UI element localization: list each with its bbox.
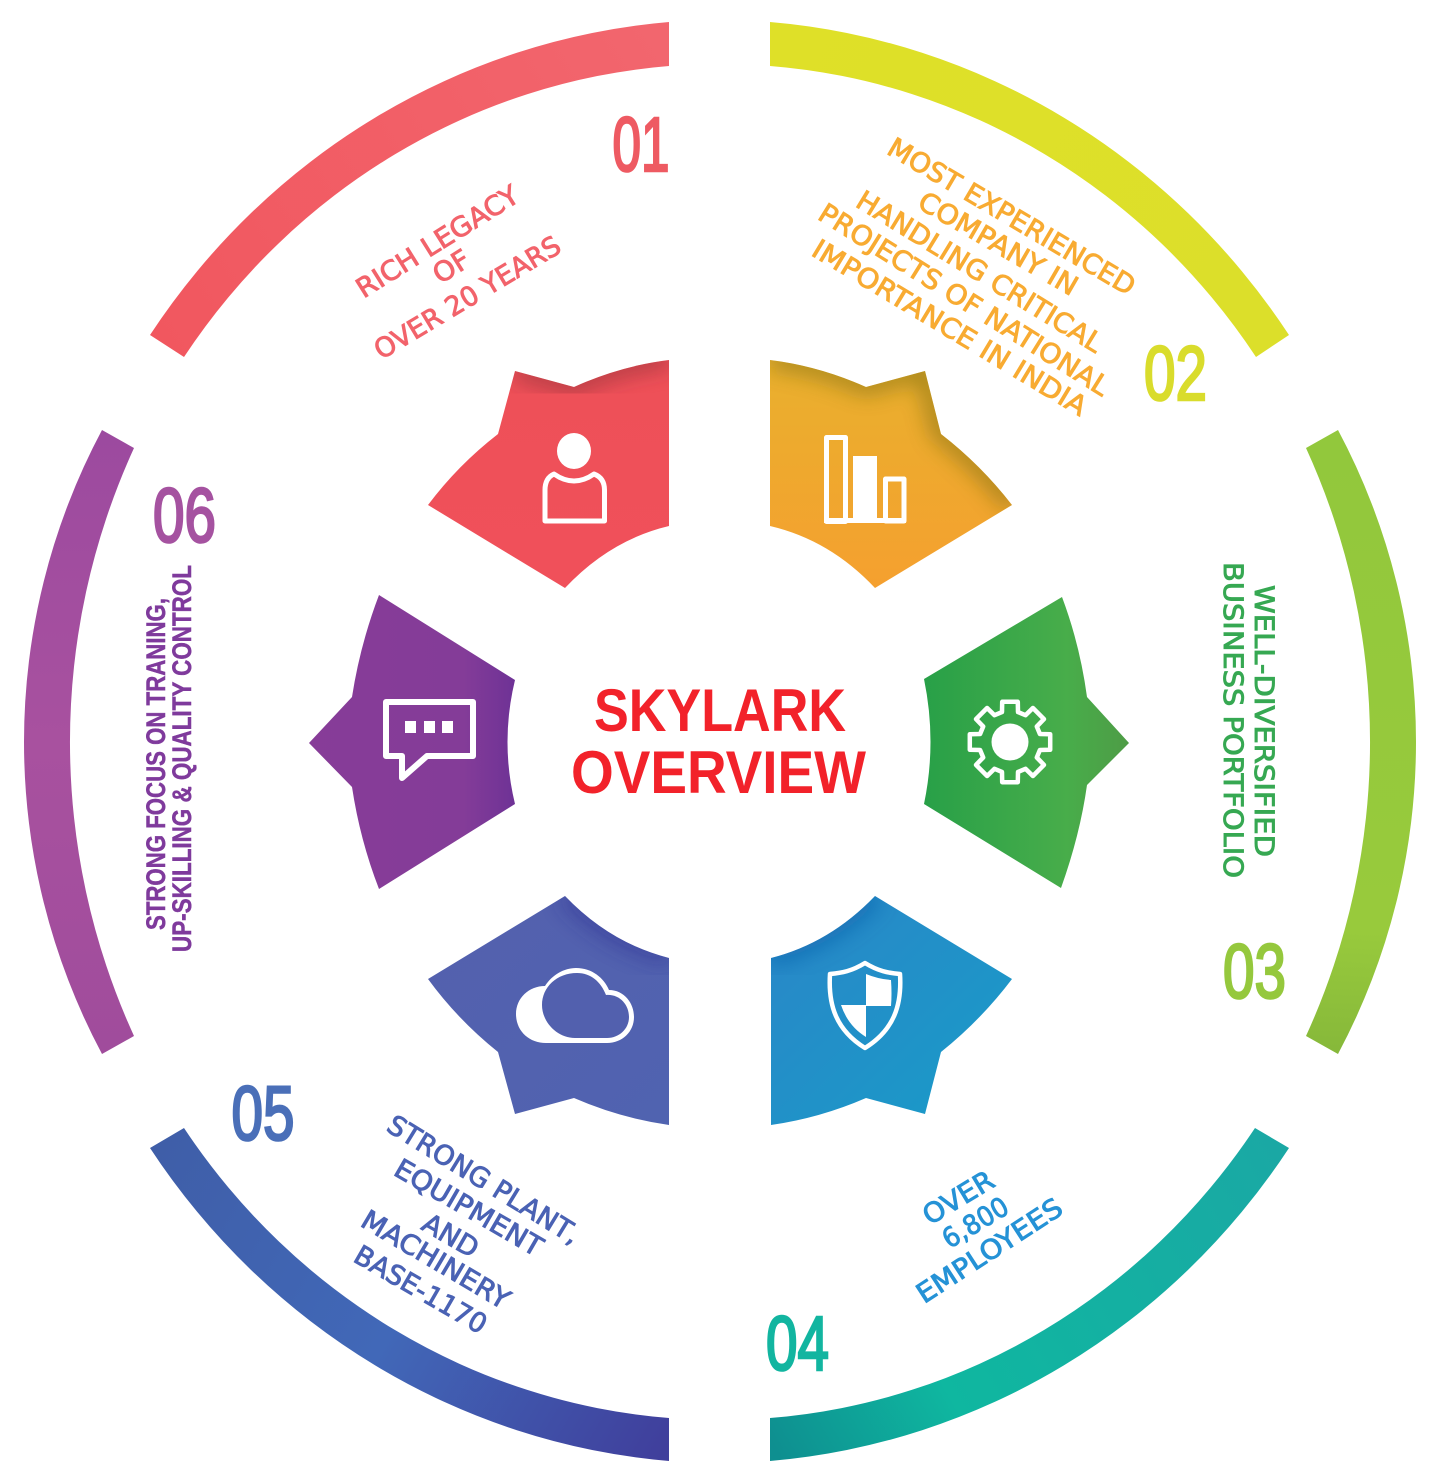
text 06: training and quality: [141, 565, 197, 952]
number 06: 06: [153, 473, 216, 559]
text 02: most experienced: PROJECTS OF NATIONAL: [813, 198, 1115, 403]
panel: red star with person icon: [428, 358, 669, 588]
text 02: most experienced: MOST EXPERIENCED: [882, 132, 1141, 302]
panel: indigo star with cloud icon: [428, 894, 671, 1125]
text 03: business portfolio: [1217, 562, 1279, 878]
panel: orange star with bar chart icon: [770, 358, 1014, 588]
text 01: rich legacy: OVER 20 YEARS: [369, 230, 567, 366]
title: [571, 677, 866, 806]
text 04: employees: EMPLOYEES: [911, 1193, 1069, 1310]
icon: shield: [830, 963, 900, 1048]
icon: speech bubble: [386, 702, 473, 778]
text 01: rich legacy: RICH LEGACY: [351, 180, 525, 305]
number 05: 05: [232, 1071, 294, 1157]
text 05: plant and machinery: STRONG PLANT,: [381, 1110, 585, 1251]
panel: green star with gear icon: [924, 597, 1129, 888]
text 05: plant and machinery: BASE-1170: [348, 1240, 492, 1341]
arc 01: [150, 22, 669, 357]
number 03: 03: [1223, 929, 1286, 1015]
text 05: plant and machinery: MACHINERY: [355, 1205, 515, 1316]
title: OVERVIEW: [571, 739, 866, 806]
number 01: 01: [612, 102, 670, 188]
arc 02: [770, 22, 1289, 357]
arc 05: [150, 1128, 669, 1461]
title: SKYLARK: [594, 677, 846, 744]
text 05: plant and machinery: [348, 1110, 585, 1341]
icon: bar chart: [824, 438, 906, 523]
text 04: employees: 6,800: [937, 1191, 1015, 1255]
text 04: employees: OVER: [917, 1165, 1000, 1232]
text 02: most experienced: IMPORTANCE IN INDIA: [806, 234, 1093, 423]
arc 04: [770, 1128, 1289, 1461]
panel: purple star with speech bubble icon: [309, 595, 515, 889]
text 05: plant and machinery: EQUIPMENT: [389, 1153, 548, 1263]
number 02: 02: [1144, 331, 1207, 417]
text 03: business portfolio: WELL-DIVERSIFIED: [1248, 585, 1279, 857]
text 06: training and quality: UP-SKILLING & QUALITY CONTROL: [167, 565, 197, 952]
numbers: [153, 102, 1286, 1387]
icon: gear: [970, 702, 1050, 782]
number 04: 04: [766, 1301, 829, 1387]
text 02: most experienced: COMPANY IN: [912, 186, 1083, 302]
text 05: plant and machinery: AND: [417, 1208, 484, 1265]
text 02: most experienced: [806, 132, 1141, 423]
arc 03: [1306, 430, 1416, 1054]
arc 06: [24, 430, 134, 1054]
icon: person: [545, 433, 604, 521]
panel: blue star with shield icon: [769, 894, 1012, 1125]
text 03: business portfolio: BUSINESS PORTFOLIO: [1217, 562, 1248, 878]
text 01: rich legacy: [351, 180, 567, 366]
text 06: training and quality: STRONG FOCUS ON TRANING,: [141, 598, 171, 930]
text 02: most experienced: HANDLING CRITICAL: [850, 185, 1108, 359]
text 01: rich legacy: OF: [427, 244, 476, 290]
icon: cloud: [516, 968, 634, 1043]
